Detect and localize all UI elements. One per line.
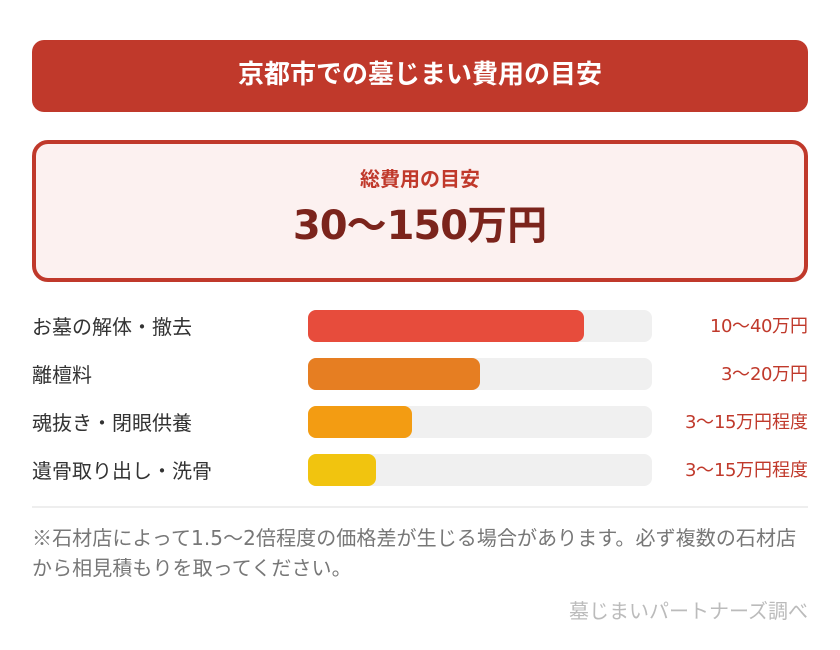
value: 3～15万円程度 (685, 460, 808, 481)
row: dismantling (32, 310, 808, 342)
label: 魂抜き・閉眼供養 (32, 411, 192, 435)
value: 3～15万円程度 (685, 412, 808, 433)
note: ※石材店によって1.5～2倍程度の価格差が生じる場合があります。必ず複数の石材店から相見積もりを取ってください。 (32, 522, 796, 580)
title banner: 京都市での墓じまい費用の目安 (238, 60, 602, 90)
label: お墓の解体・撤去 (32, 315, 192, 339)
row: remains removal (32, 454, 808, 486)
label: 遺骨取り出し・洗骨 (32, 459, 212, 483)
bar (308, 358, 652, 390)
value: 10～40万円 (710, 316, 808, 337)
label: 離檀料 (32, 363, 92, 387)
bar (308, 310, 652, 342)
row: temple leaving fee (32, 358, 808, 390)
value: 3～20万円 (721, 364, 808, 385)
total cost value: 30～150万円 (293, 203, 547, 249)
bar (308, 406, 652, 438)
total cost label: 総費用の目安 (360, 167, 480, 191)
panel: total cost (32, 140, 808, 282)
title banner (32, 40, 808, 112)
source: 墓じまいパートナーズ調べ (569, 599, 808, 623)
row: memorial service (32, 406, 808, 438)
bar (308, 454, 652, 486)
